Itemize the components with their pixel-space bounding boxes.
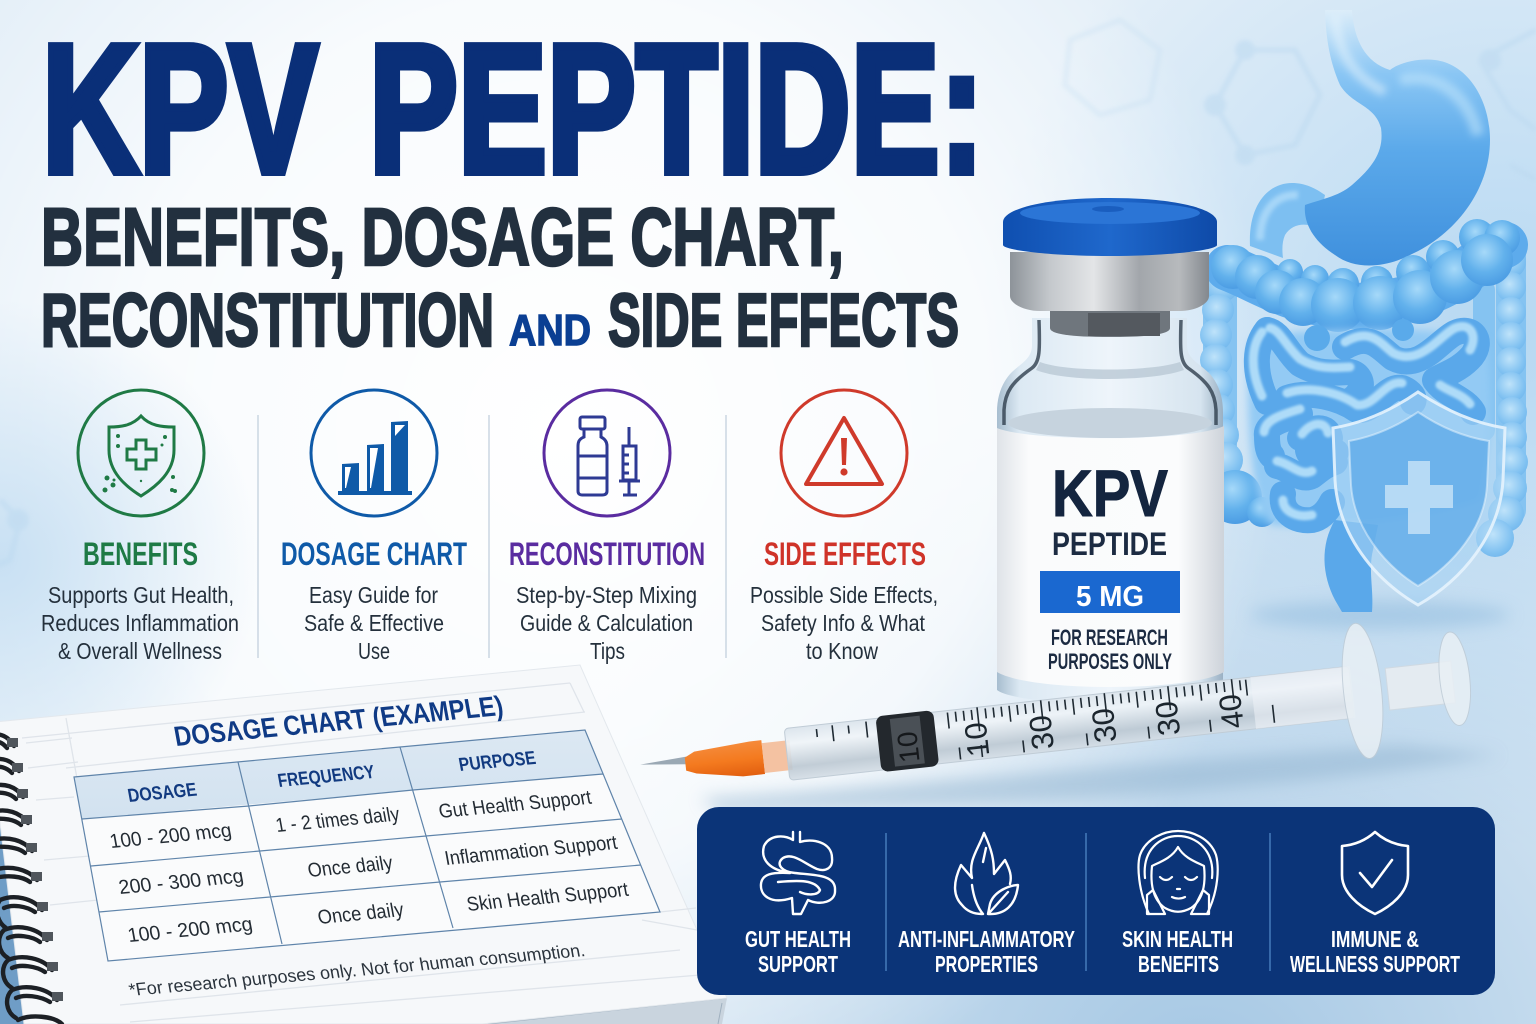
dosage table: 200 - 300 mcg [117, 865, 245, 899]
icon: flame and leaf [955, 833, 1018, 914]
description: dosage chart: Use [358, 638, 390, 664]
label: skin health: SKIN HEALTH [1122, 926, 1233, 952]
chart heading: DOSAGE CHART (EXAMPLE) [172, 690, 506, 752]
needle [640, 756, 689, 770]
spiral binding [0, 734, 63, 1024]
item: immune [1290, 832, 1460, 977]
description: benefits: Supports Gut Health, [48, 582, 234, 608]
heading: dosage chart: DOSAGE CHART [281, 536, 467, 572]
icon: shield with check [1342, 832, 1408, 914]
stopper [875, 710, 939, 772]
label: skin health [1122, 926, 1233, 977]
illustration: vial [997, 198, 1224, 704]
column: reconstitution [509, 390, 705, 664]
dosage table: Skin Health Support [465, 879, 631, 916]
icon: shield with cross [78, 390, 204, 516]
title: PEPTIDE: [369, 6, 984, 211]
heading: side effects: SIDE EFFECTS [764, 536, 926, 572]
shield with cross [1333, 392, 1505, 605]
subtitle line 2: AND [509, 306, 591, 355]
label: immune: IMMUNE & [1331, 926, 1419, 952]
dosage table: DOSAGE [126, 780, 199, 807]
vial glass [997, 311, 1223, 704]
icon: face [1139, 831, 1218, 914]
vial label: KPV [1052, 456, 1168, 530]
dosage table: 100 - 200 mcg [108, 820, 233, 853]
column: dosage chart [281, 390, 467, 664]
feature columns [41, 390, 938, 664]
description: dosage chart: Easy Guide for [309, 582, 438, 608]
label: gut health [745, 926, 851, 977]
heading: reconstitution: RECONSTITUTION [509, 536, 705, 572]
stopper: 10 [891, 730, 926, 764]
small intestine [1248, 319, 1490, 612]
notebook page [0, 665, 727, 1024]
scale numbers: 30 [1149, 699, 1187, 737]
vial label: FOR RESEARCH [1051, 625, 1168, 650]
illustration: syringe [633, 611, 1477, 838]
description: side effects: to Know [806, 638, 878, 664]
column: side effects [750, 390, 938, 664]
illustration: stomach and intestines [1200, 10, 1528, 629]
vial label: PURPOSES ONLY [1048, 649, 1172, 674]
dosage table: Once daily [316, 899, 406, 929]
item: gut health [745, 832, 851, 977]
description: reconstitution: Step-by-Step Mixing [516, 582, 697, 608]
description: side effects [750, 582, 938, 664]
scale numbers: 30 [1022, 713, 1061, 751]
description: benefits: Reduces Inflammation [41, 610, 239, 636]
label: anti-inflammatory: ANTI-INFLAMMATORY [898, 926, 1075, 952]
icon: warning triangle [781, 390, 907, 516]
flange and plunger [1336, 611, 1477, 761]
dosage table: PURPOSE [457, 748, 538, 776]
label: skin health: BENEFITS [1138, 951, 1219, 977]
title [41, 6, 984, 362]
label: gut health: GUT HEALTH [745, 926, 851, 952]
subtitle line 2: RECONSTITUTION [41, 278, 494, 362]
label: gut health: SUPPORT [758, 951, 838, 977]
item: skin health [1122, 831, 1233, 977]
dosage table: 100 - 200 mcg [126, 913, 254, 947]
dosage table [74, 730, 660, 961]
title: KPV [42, 6, 318, 211]
description: side effects: Possible Side Effects, [750, 582, 938, 608]
notebook: dosage chart [0, 665, 727, 1024]
subtitle line 2: SIDE EFFECTS [608, 278, 959, 362]
scale numbers: 30 [1085, 706, 1124, 745]
dosage table: FREQUENCY [276, 762, 377, 792]
column: benefits [41, 390, 239, 664]
icon: vial and syringe [544, 390, 670, 516]
description: side effects: Safety Info & What [761, 610, 926, 636]
description: benefits [41, 582, 239, 664]
orange hub [684, 737, 793, 783]
description: dosage chart [304, 582, 444, 664]
blue cap [1003, 198, 1217, 256]
scale numbers [958, 692, 1251, 759]
subtitle line 1: BENEFITS, DOSAGE CHART, [41, 192, 844, 283]
metal crimp [1010, 252, 1209, 311]
footnote: *For research purposes only. Not for human consumption. [127, 940, 587, 1000]
description: reconstitution [516, 582, 697, 664]
dosage table: Gut Health Support [437, 787, 594, 823]
dosage table: Inflammation Support [443, 832, 620, 870]
dosage table: Once daily [306, 852, 395, 882]
barrel [784, 664, 1356, 782]
scale numbers: 10 [958, 720, 996, 759]
description: benefits: & Overall Wellness [58, 638, 222, 664]
vial label: 5 MG [1076, 581, 1144, 613]
label: anti-inflammatory [898, 926, 1075, 977]
label: anti-inflammatory: PROPERTIES [935, 951, 1038, 977]
description: reconstitution: Guide & Calculation [520, 610, 693, 636]
label: immune: WELLNESS SUPPORT [1290, 951, 1460, 977]
stomach [1250, 10, 1490, 266]
scale numbers: 40 [1212, 692, 1251, 730]
description: dosage chart: Safe & Effective [304, 610, 444, 636]
molecule pattern [0, 20, 1536, 570]
vial label [997, 426, 1224, 687]
icon: intestines [761, 832, 835, 914]
description: reconstitution: Tips [590, 638, 625, 664]
benefits panel [697, 807, 1495, 995]
large intestine [1200, 219, 1528, 557]
dosage table: 1 - 2 times daily [274, 804, 401, 837]
item: anti-inflammatory [898, 833, 1075, 977]
icon: bar chart [311, 390, 437, 516]
label: immune [1290, 926, 1460, 977]
vial label: PEPTIDE [1052, 526, 1167, 562]
heading: benefits: BENEFITS [83, 536, 198, 572]
syringe shadow [700, 745, 1500, 812]
